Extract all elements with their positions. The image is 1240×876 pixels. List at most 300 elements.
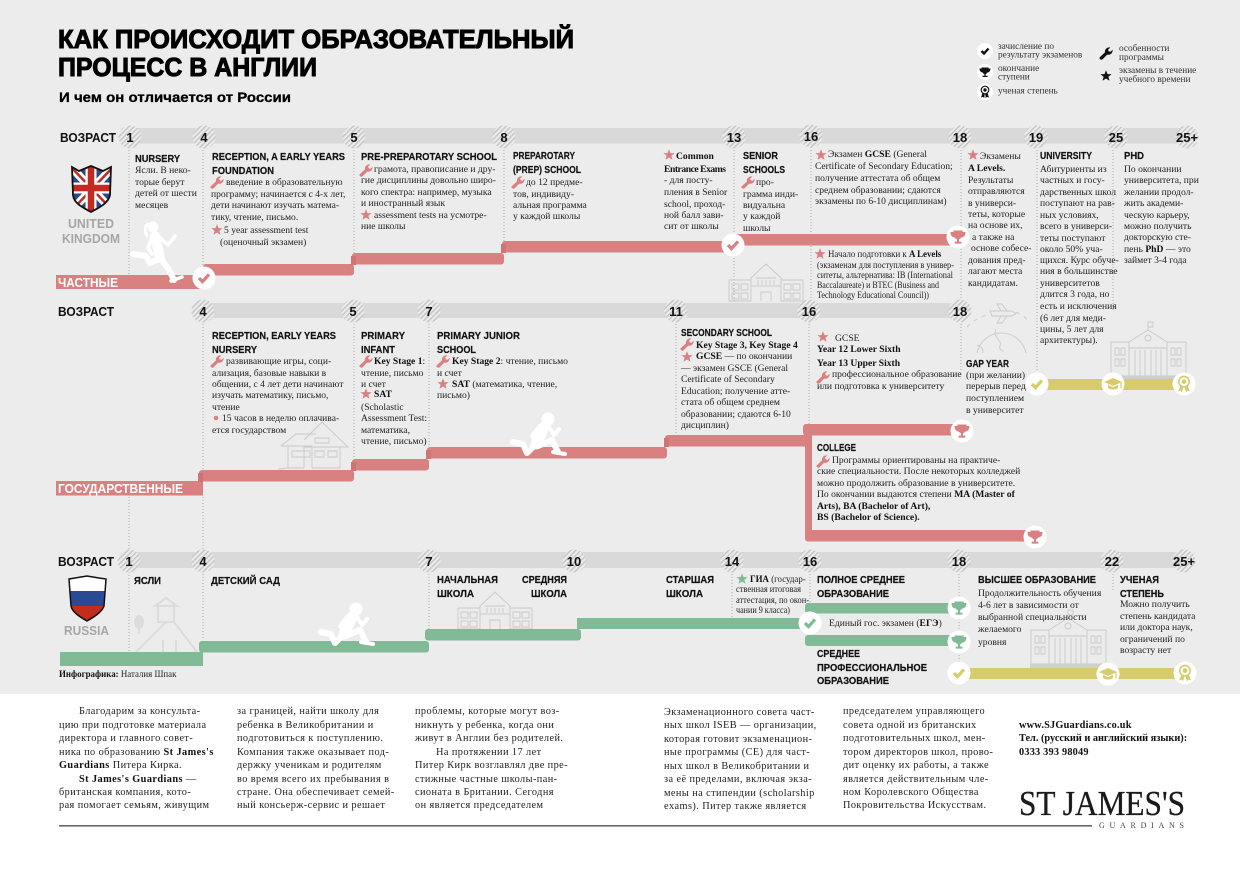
text: preparatory: до 12 предме- (526, 177, 583, 188)
text: higher education: Продолжительность обучения (978, 588, 1102, 599)
text: sixth form: или подготовка к университету (817, 381, 944, 392)
text: preparatory: альная программа (513, 200, 588, 211)
text: primary school: ШКОЛА (437, 588, 474, 600)
text: PhD (1123, 150, 1199, 266)
text: GIA: аттестация, по окон- (736, 595, 809, 605)
cap icon (1096, 662, 1120, 686)
text: vocational: ОБРАЗОВАНИЕ (817, 675, 889, 687)
icon: school (458, 592, 532, 629)
text: university: ных условиях, (1040, 210, 1099, 221)
legend: star: учебного времени (1119, 74, 1191, 85)
footer text column 2: ребенка в Великобритании и (237, 720, 374, 731)
age bar UK: 18 (953, 130, 967, 145)
footer text column 3: он является председателем (415, 800, 544, 811)
legend: trophy (977, 64, 1039, 82)
rule (59, 825, 1092, 827)
text: secondary: Education; получение атте- (681, 386, 790, 397)
text: reception nursery: ется государством (212, 425, 286, 436)
text: reception nursery: NURSERY (212, 344, 257, 356)
footer text column 1: ника по образованию St James's (59, 747, 214, 758)
text: reception foundation: дети начинают изучать матема- (211, 200, 339, 211)
age bar state: 5 (349, 304, 357, 319)
text: university: около 50% уча- (1040, 244, 1103, 255)
text: university: всего в универси- (1040, 221, 1112, 232)
text: pre-preparatory: гие дисциплины довольно широ- (361, 175, 496, 186)
logo: GUARDIANS (1099, 821, 1184, 830)
text: college: Программы ориентированы на практиче- (832, 455, 1000, 466)
text: reception nursery: RECEPTION, EARLY YEARS (212, 330, 336, 342)
text: middle school: СРЕДНЯЯ (522, 574, 567, 586)
text: degree (1120, 574, 1196, 656)
yellow ribbon Russia (959, 668, 1185, 679)
footer text column 5: совета одной из британских (843, 720, 977, 731)
text: GCSE exam: получение аттестата об общем (815, 173, 940, 184)
text: PhD: пень PhD — это (1124, 244, 1191, 255)
text: A levels preparation: (экзаменам для поступления в универ- (817, 260, 954, 270)
footer text column 2 (237, 706, 395, 811)
row 2: state schools (56, 300, 1196, 548)
text: higher education: желаемого (977, 624, 1022, 635)
text: gap year: (при желании) (966, 370, 1025, 381)
text: college (816, 442, 1020, 523)
country label Russia: RUSSIA (64, 624, 109, 638)
text: preparatory (511, 150, 588, 222)
rosette icon (1174, 662, 1196, 684)
text: PhD: займет 3-4 года (1124, 255, 1187, 266)
text: preparatory: PREPAROTARY (513, 150, 575, 162)
credit: Инфографика: Наталия Шпак (59, 669, 177, 679)
footer text column 5: председателем управляющего (843, 706, 985, 717)
text: senior schools: у каждой (743, 211, 780, 222)
age bar Russia: 10 (567, 554, 581, 569)
text: secondary: — экзамен GSCE (General (680, 363, 788, 374)
trophy icon (950, 420, 974, 442)
age bar UK: 8 (500, 130, 508, 145)
row 1: United Kingdom private schools (56, 124, 1199, 346)
title: ПРОЦЕСС В АНГЛИИ (58, 52, 317, 82)
text: university: частных и госу- (1040, 175, 1105, 186)
text: reception nursery: общении, с 4 лет дети начинают (212, 379, 344, 390)
text: nursery: NURSERY (135, 153, 180, 165)
age bar Russia: 16 (803, 554, 817, 569)
logo: ST JAMES'S (1019, 784, 1185, 823)
footer background (0, 694, 1240, 876)
text: university: цины, 5 лет для (1040, 324, 1104, 335)
text: primary junior (436, 330, 568, 401)
icon: university (1030, 610, 1107, 668)
age bar state: ВОЗРАСТ (58, 304, 114, 319)
footer text column 3: Питер Кирк возглавлял две пре- (415, 760, 568, 771)
text: secondary: стата об общем среднем (681, 397, 780, 408)
icon: running girl (133, 222, 182, 281)
text: kindergarten: ДЕТСКИЙ САД (211, 574, 280, 587)
age bar state: 4 (199, 304, 207, 319)
check icon (192, 266, 216, 290)
text: GCSE exam: среднем образовании; сдаются (815, 185, 941, 196)
dotted age guide lines (129, 144, 1113, 668)
school icon (729, 264, 803, 301)
text: common entrance: Entrance Exams (664, 164, 726, 175)
text: A levels exams: кандидатам. (968, 278, 1018, 289)
legend: wrench: особенности (1119, 43, 1169, 54)
text: sixth form: Year 12 Lower Sixth (817, 344, 901, 355)
icon: UK shield (72, 167, 110, 211)
text: common entrance: - для посту- (664, 175, 713, 186)
text: senior schools: видуальна (743, 200, 786, 211)
text: pre-preparatory: и иностранный язык (361, 198, 445, 209)
text: secondary: SECONDARY SCHOOL (681, 327, 772, 339)
text: GIA (736, 573, 809, 615)
text: reception nursery: ализация, базовые навыки в (212, 368, 327, 379)
text: pre-preparatory: кого спектра: например, музыка (361, 187, 492, 198)
text: higher education: выбранной специальности (978, 612, 1087, 623)
text: degree: возрасту нет (1120, 645, 1172, 656)
age bar Russia (58, 550, 1196, 572)
text: university (1040, 150, 1119, 346)
text: degree: УЧЕНАЯ (1120, 574, 1159, 586)
legend: star (1100, 66, 1196, 85)
trophy icon (946, 226, 970, 248)
age bar UK: 16 (804, 129, 818, 144)
footer text column 1: рая помогает семьям, живущим (59, 800, 210, 811)
age bar UK: 13 (727, 130, 741, 145)
footer text column 4: ные программы (CE) для част- (664, 747, 810, 758)
icon: running man (321, 602, 373, 644)
text: reception foundation: (оценочный экзамен) (220, 237, 306, 248)
text: middle school: ШКОЛА (531, 588, 567, 600)
footer text column 1: St James's Guardians — (79, 774, 197, 785)
subtitle: И чем он отличается от России (59, 89, 291, 105)
text: A levels exams: A Levels. (968, 163, 1005, 174)
text: university: UNIVERSITY (1040, 150, 1092, 162)
text: sixth form: GCSE (835, 333, 860, 344)
text: primary infant: Assessment Test: (361, 413, 427, 424)
legend: rosette (977, 84, 1058, 100)
footer text column 4: ных школ в Великобритании и (664, 761, 810, 772)
text: secondary: дисциплин) (681, 420, 729, 431)
text: gap year: в университет (966, 405, 1024, 416)
text: gap year: поступлением (966, 393, 1024, 404)
age bar Russia: 25+ (1173, 554, 1195, 569)
footer text column 3: сионата в Британии. Сегодня (415, 787, 554, 798)
text: unified exam: Единый гос. экзамен (ЕГЭ) (829, 618, 942, 629)
text: sixth form: профессиональное образование (832, 369, 962, 380)
text: primary infant: PRIMARY (361, 330, 405, 342)
text: nursery Russia: ЯСЛИ (134, 575, 161, 587)
contacts: www.SJGuardians.co.uk (1019, 720, 1132, 731)
text: A levels preparation: Baccalaureate) и BTEC (Business and (817, 280, 939, 290)
footer text column 3: проблемы, которые могут воз- (415, 706, 560, 717)
check icon (948, 662, 970, 684)
age bar Russia: 4 (199, 554, 207, 569)
footer text column 5: ном Королевского Общества (843, 787, 979, 798)
trophy icon (948, 596, 970, 620)
text: degree: или доктора наук, (1120, 622, 1193, 633)
footer text column 5: дит оценку их работы, а также (843, 760, 989, 771)
text: reception nursery: 15 часов в неделю оплачива- (222, 413, 339, 424)
text: university: теты поступают (1040, 233, 1106, 244)
text: university: ния в большинстве (1040, 266, 1118, 277)
green ribbon (60, 603, 959, 666)
text: A levels exams: дования пред- (968, 255, 1026, 266)
text: degree: Можно получить (1120, 599, 1190, 610)
text: nursery: Ясли. В неко- (135, 165, 191, 176)
text: GCSE exam: Экзамен GCSE (General (828, 149, 927, 160)
text: middle school (522, 574, 567, 600)
text: college: ские специальности. После некоторых колледжей (817, 466, 1020, 477)
legend (977, 42, 1196, 100)
footer text column 2: ный консьерж-сервис и решает (237, 800, 385, 811)
text: reception nursery: чтение (212, 402, 240, 413)
age bar Russia: 18 (952, 554, 966, 569)
check icon (722, 234, 744, 256)
country label UK (62, 217, 120, 246)
text: nursery: месяцев (135, 200, 169, 211)
text: common entrance: сит от школы (664, 221, 719, 232)
age bar Russia: 22 (1105, 554, 1119, 569)
house icon (278, 422, 348, 469)
text: full secondary (817, 574, 905, 600)
text: primary junior: письмо) (437, 390, 470, 401)
footer text column 3: живут в Англии без родителей. (414, 733, 563, 744)
age bar state (58, 300, 972, 322)
text: college: Arts), BA (Bachelor of Art), (817, 501, 931, 512)
text: reception foundation: введение в образовательную (226, 177, 343, 188)
title: КАК ПРОИСХОДИТ ОБРАЗОВАТЕЛЬНЫЙ (58, 24, 574, 54)
age bar UK: ВОЗРАСТ (60, 130, 116, 145)
country label UK: KINGDOM (62, 232, 120, 246)
footer text column 1 (59, 706, 214, 811)
text: vocational: СРЕДНЕЕ (817, 648, 860, 660)
text: university: дарственных школ (1040, 187, 1116, 198)
text: senior school: СТАРШАЯ (666, 574, 714, 586)
legend: trophy: окончание (998, 64, 1039, 74)
text: A levels preparation: ситеты, альтернатива: IB (International (817, 270, 953, 280)
text: university: Абитуриенты из (1040, 164, 1107, 175)
text: higher education: уровня (978, 637, 1007, 648)
text: gap year (966, 358, 1026, 416)
text: university: университетов (1040, 278, 1100, 289)
footer text column 2: Компания также оказывает под- (237, 747, 389, 758)
text: full secondary: ОБРАЗОВАНИЕ (817, 588, 889, 600)
text: A levels exams: в универси- (968, 198, 1016, 209)
text: senior schools: SENIOR (743, 150, 778, 162)
text: GIA: ГИА (государ- (750, 574, 806, 584)
text: reception foundation: RECEPTION, A EARLY YEARS (212, 151, 345, 163)
text: university: длится 3 года, но (1040, 289, 1110, 300)
text: GCSE exam: экзамены по 6-10 дисциплинам) (815, 196, 947, 207)
text: primary infant: математика, (361, 425, 410, 436)
text: A levels exams: отправляются (968, 186, 1025, 197)
text: A levels exams: теты, которые (968, 209, 1025, 220)
footer text column 3: стижные частные школы-пан- (415, 774, 558, 785)
text: degree: степень кандидата (1120, 611, 1196, 622)
text: preparatory: у каждой школы (513, 211, 581, 222)
icon: Russia shield (70, 577, 105, 620)
text: GCSE exam (815, 149, 953, 207)
footer text column 5: подготовительных школ, мен- (843, 733, 986, 744)
country label UK: UNITED (68, 217, 114, 231)
rosette icon (1172, 372, 1196, 396)
text: PhD: можно получить (1124, 221, 1192, 232)
text: reception foundation: 5 year assessment test (224, 225, 309, 236)
footer text column 4: которая готовит экзаменацион- (664, 734, 813, 745)
text: reception foundation (210, 151, 345, 248)
text: degree: ограничений по (1120, 634, 1185, 645)
age bar state: 11 (669, 304, 683, 319)
check icon (1026, 372, 1048, 396)
text: GCSE exam: Certificate of Secondary Education; (815, 161, 953, 172)
text: reception foundation: программу; начинается с 4-х лет, (211, 189, 345, 200)
footer text column 1: цию при подготовке материала (59, 720, 206, 731)
text: higher education: ВЫСШЕЕ ОБРАЗОВАНИЕ (978, 574, 1096, 586)
text: senior schools (741, 150, 798, 234)
icon: playground (135, 598, 197, 652)
text: senior school (666, 574, 714, 600)
footer text column 2: держку ученикам и родителям (237, 760, 382, 771)
text: senior school: ШКОЛА (666, 588, 703, 600)
age bar state: 18 (953, 304, 967, 319)
text: nursery: детей от шести (135, 188, 197, 199)
label: state: ГОСУДАРСТВЕННЫЕ (58, 482, 183, 496)
pink ribbon state (56, 424, 1035, 542)
text: pre-preparatory: assessment tests на усмотре- (374, 210, 487, 221)
text: higher education (977, 574, 1102, 648)
contacts: Тел. (русский и английский языки): (1019, 733, 1187, 744)
text: common entrance: Common (676, 151, 715, 162)
text: primary junior: и счет (437, 368, 463, 379)
text: preparatory: тов, индивиду- (513, 189, 574, 200)
text: PhD: По окончании (1124, 164, 1182, 175)
text: secondary: Key Stage 3, Key Stage 4 (696, 340, 798, 351)
text: primary infant: чтение, письмо (361, 368, 424, 379)
text: nursery: торые берут (135, 177, 185, 188)
text: pre-preparatory (359, 151, 498, 232)
text: primary junior: SAT (математика, чтение, (452, 379, 557, 390)
legend: wrench: программы (1119, 53, 1165, 63)
age bar state: 7 (425, 304, 433, 319)
text: university: архитектуры). (1040, 335, 1098, 346)
page background (0, 0, 1240, 694)
text: higher education: 4-6 лет в зависимости от (978, 600, 1080, 611)
legend: wrench (1099, 43, 1169, 63)
text: pre-preparatory: PRE-PREPAROTARY SCHOOL (361, 151, 498, 163)
text: PhD: PHD (1124, 150, 1144, 162)
text: A levels exams: лагают места (968, 266, 1023, 277)
text: university: есть и исключения (1040, 301, 1117, 312)
footer text column 2: во время всего их пребывания в (237, 774, 389, 785)
footer text column 2: подготовиться к поступлению. (237, 733, 383, 744)
text: A levels exams: Результаты (968, 175, 1014, 186)
icon: globe and plane (967, 304, 1030, 353)
text: college: По окончании выдаются степени MA (Master of (817, 489, 1016, 500)
text: vocational (817, 648, 927, 687)
text: primary junior: SCHOOL (437, 344, 477, 356)
text: secondary (680, 327, 798, 431)
text: sixth form: Year 13 Upper Sixth (817, 358, 901, 369)
footer (59, 706, 1187, 830)
row 3: Russia (58, 550, 1196, 687)
text: primary junior: Key Stage 2: чтение, письмо (452, 356, 568, 367)
text: GIA: ственная итоговая (736, 584, 801, 594)
icon: university (1110, 322, 1187, 380)
text: A levels preparation: Начало подготовки к A Levels (828, 249, 942, 259)
text: primary infant: (Scholastic (361, 402, 404, 413)
text: A levels exams: Экзамены (980, 151, 1021, 162)
text: PhD: университета, при (1124, 175, 1199, 186)
text: A levels preparation: Technology Educational Council)) (817, 290, 929, 300)
shield outline (69, 576, 106, 621)
age bar UK: 1 (126, 130, 134, 145)
text: full secondary: ПОЛНОЕ СРЕДНЕЕ (817, 574, 905, 586)
text: primary school: НАЧАЛЬНАЯ (437, 574, 498, 586)
icon: running man (513, 412, 565, 454)
age bar Russia: ВОЗРАСТ (58, 554, 114, 569)
text: A levels exams: основе собесе- (971, 243, 1032, 254)
footer text column 2: стране. Она обеспечивает семей- (237, 787, 395, 798)
text: secondary: образовании; сдаются 6-10 (681, 409, 791, 420)
text: senior schools: школы (743, 223, 771, 234)
footer text column 1: британская компания, кото- (59, 787, 191, 798)
text: A levels exams: на основе их, (968, 220, 1022, 231)
age bar state: 16 (802, 304, 816, 319)
text: reception foundation: тику, чтение, письмо. (211, 212, 298, 223)
age bar UK (60, 124, 1198, 148)
text: university: щихся. Курс обуче- (1040, 255, 1119, 266)
legend: check (977, 42, 1083, 60)
text: A levels exams: а также на (972, 232, 1015, 243)
text: primary infant: чтение, письмо) (361, 436, 427, 447)
age bar Russia: 14 (725, 554, 740, 569)
text: secondary: GCSE — по окончании (696, 351, 792, 362)
contacts: 0333 393 98049 (1019, 747, 1089, 758)
text: A levels preparation (814, 248, 954, 300)
cap icon (1102, 372, 1124, 396)
footer text column 4: за её пределами, включая экза- (664, 774, 812, 785)
footer text column 4: ных школ ISEB — организации, (664, 720, 817, 731)
yellow ribbon university (1037, 379, 1184, 390)
footer text column 4: exams). Питер также является (664, 801, 807, 812)
footer text column 1: Guardians Питера Кирка. (59, 760, 182, 771)
text: degree: СТЕПЕНЬ (1120, 588, 1164, 600)
text: reception nursery: развивающие игры, соци- (226, 356, 331, 367)
age bar UK: 25+ (1176, 130, 1198, 145)
footer text column 3: На протяжении 17 лет (436, 747, 542, 758)
footer text column 5: является действительным чле- (843, 774, 989, 785)
label: private: ЧАСТНЫЕ (58, 276, 118, 290)
age bar UK: 4 (200, 130, 208, 145)
text: common entrance (663, 149, 728, 232)
text: senior schools: SCHOOLS (743, 164, 785, 176)
legend: rosette: ученая степень (998, 86, 1058, 96)
footer text column 5: тором директоров школ, прово- (843, 747, 993, 758)
footer text column 5 (843, 706, 993, 811)
text: gap year: GAP YEAR (966, 358, 1009, 370)
text: college: можно продолжить образование в университете. (817, 478, 1015, 489)
legend: star: экзамены в течение (1119, 66, 1196, 76)
text: common entrance: school, проход- (664, 199, 725, 210)
footer text column 2: за границей, найти школу для (237, 706, 379, 717)
age bar Russia: 7 (425, 554, 433, 569)
text: primary infant: и счет (361, 379, 387, 390)
footer text column 4: мены на стипендии (scholarship (664, 788, 815, 799)
text: reception nursery (210, 330, 344, 436)
text: reception foundation: FOUNDATION (212, 165, 274, 177)
legend: check: зачисление по (998, 42, 1054, 52)
text: pre-preparatory: ние школы (361, 221, 406, 232)
footer text column 3: никнуть у ребенка, когда они (415, 720, 554, 731)
contacts (1019, 720, 1187, 758)
